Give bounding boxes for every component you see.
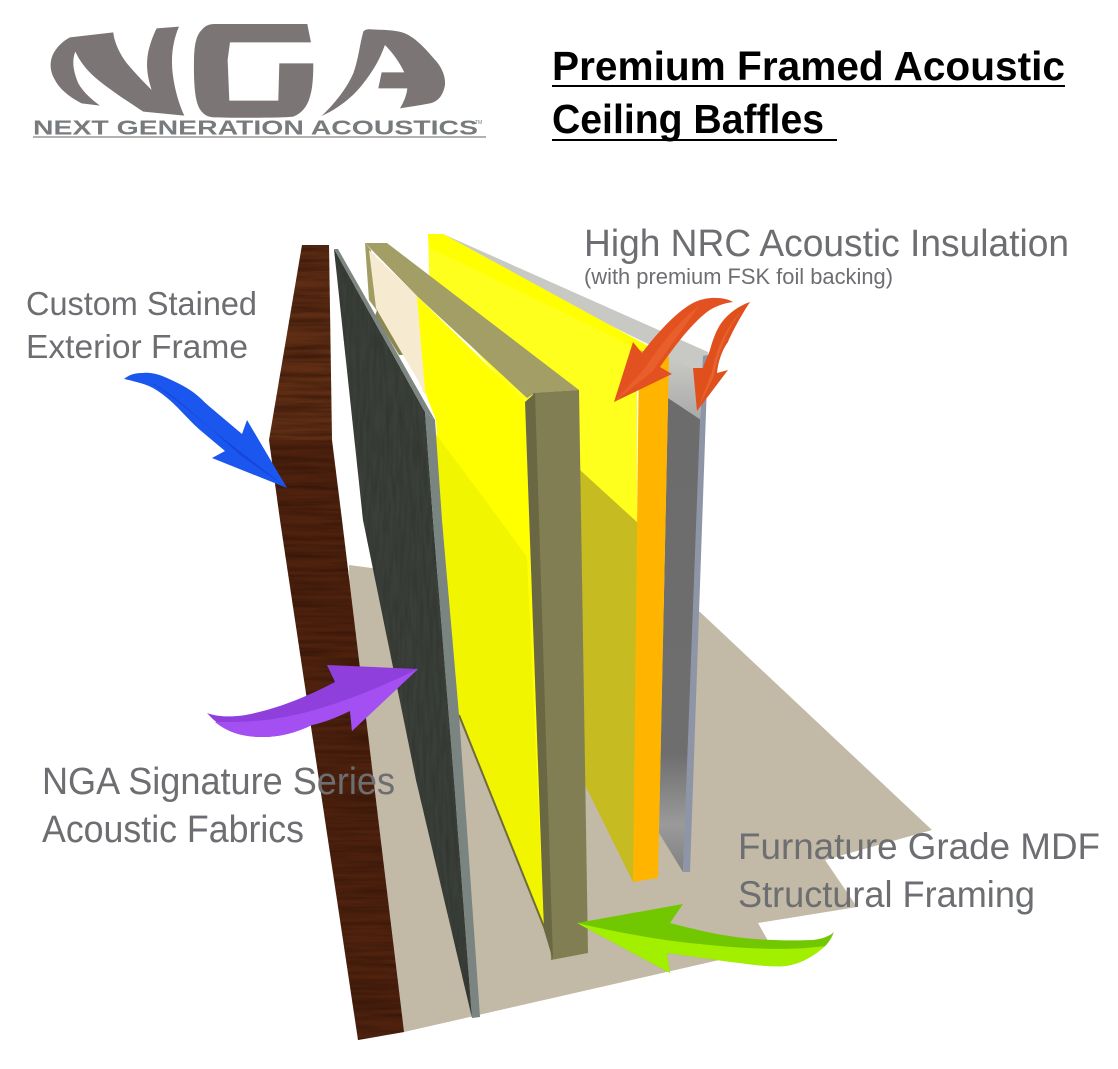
frame label line 1: Custom Stained	[26, 285, 257, 322]
logo letters NGA	[51, 24, 445, 118]
label: NGA Signature Series Acoustic Fabrics	[42, 761, 395, 851]
trademark mark: TM	[475, 120, 482, 126]
arrow: red to insulation	[614, 298, 733, 402]
fabric face	[334, 249, 472, 1018]
title line 2: Ceiling Baffles	[552, 96, 824, 142]
layer: stained exterior frame	[269, 245, 404, 1040]
arrow: purple to fabric	[207, 665, 418, 737]
title	[552, 43, 1065, 142]
MDF post side	[525, 393, 553, 960]
insulation shaded lower face	[580, 470, 638, 882]
frame label line 2: Exterior Frame	[26, 328, 248, 365]
layer: back yellow insulation	[428, 234, 669, 882]
layer: gray foil backing	[430, 234, 708, 872]
insulation label sub: (with premium FSK foil backing)	[584, 264, 893, 289]
blue arrow body	[124, 373, 287, 488]
insulation orange edge	[633, 350, 669, 882]
MDF inner left edge	[365, 243, 378, 312]
purple arrow body	[207, 665, 418, 737]
MDF label line 2: Structural Framing	[738, 874, 1035, 915]
logo underline	[33, 136, 486, 138]
fabric edge top	[334, 249, 435, 420]
arrow: green to MDF frame	[577, 904, 834, 973]
title underline 1	[552, 85, 1065, 87]
MDF label line 1: Furnature Grade MDF	[738, 826, 1100, 867]
layer: MDF frame	[365, 243, 588, 960]
label: High NRC Acoustic Insulation	[584, 223, 1069, 289]
fabric label line 1: NGA Signature Series	[42, 761, 395, 803]
yellow insulation shaded	[435, 433, 544, 930]
logo tagline: NEXT GENERATION ACOUSTICS	[33, 118, 478, 140]
arrow: blue to exterior frame	[124, 373, 287, 488]
green arrow lower bevel	[577, 923, 825, 973]
foil shaded face	[659, 398, 701, 872]
MDF top rail	[365, 243, 579, 398]
insulation face lit	[428, 234, 648, 525]
insulation top edge	[428, 234, 650, 352]
green arrow body	[577, 904, 834, 973]
yellow insulation front	[417, 296, 546, 930]
yellow bottom edge line	[459, 715, 546, 932]
title underline 2	[552, 139, 837, 141]
red foil arrow body	[693, 302, 750, 411]
insulation label main: High NRC Acoustic Insulation	[584, 223, 1069, 265]
blue arrow ridge	[150, 382, 287, 488]
purple arrow lower bevel	[215, 669, 418, 737]
frame top face	[269, 245, 332, 440]
arrow: red to foil backing	[693, 302, 750, 411]
red foil arrow ridge	[697, 310, 742, 411]
red arrow body	[614, 298, 733, 402]
MDF post front	[533, 390, 588, 960]
fabric edge strip	[425, 412, 480, 1018]
label: Furnature Grade MDF Structural Framing	[738, 826, 1100, 915]
logo: NGA Next Generation Acoustics	[33, 24, 486, 139]
floor plane	[349, 565, 932, 1040]
frame front face	[269, 440, 404, 1040]
fabric label line 2: Acoustic Fabrics	[42, 809, 304, 851]
title line 1: Premium Framed Acoustic	[552, 43, 1065, 89]
exploded baffle layers	[269, 234, 708, 1040]
foil front face	[668, 357, 700, 420]
red arrow ridge	[614, 305, 700, 402]
layer: fabric panel	[334, 249, 480, 1018]
foil edge strip	[683, 355, 708, 872]
foil top face	[430, 234, 708, 420]
label: Custom Stained Exterior Frame	[26, 285, 257, 365]
small slat	[375, 310, 403, 355]
cream back of frame	[369, 250, 425, 395]
